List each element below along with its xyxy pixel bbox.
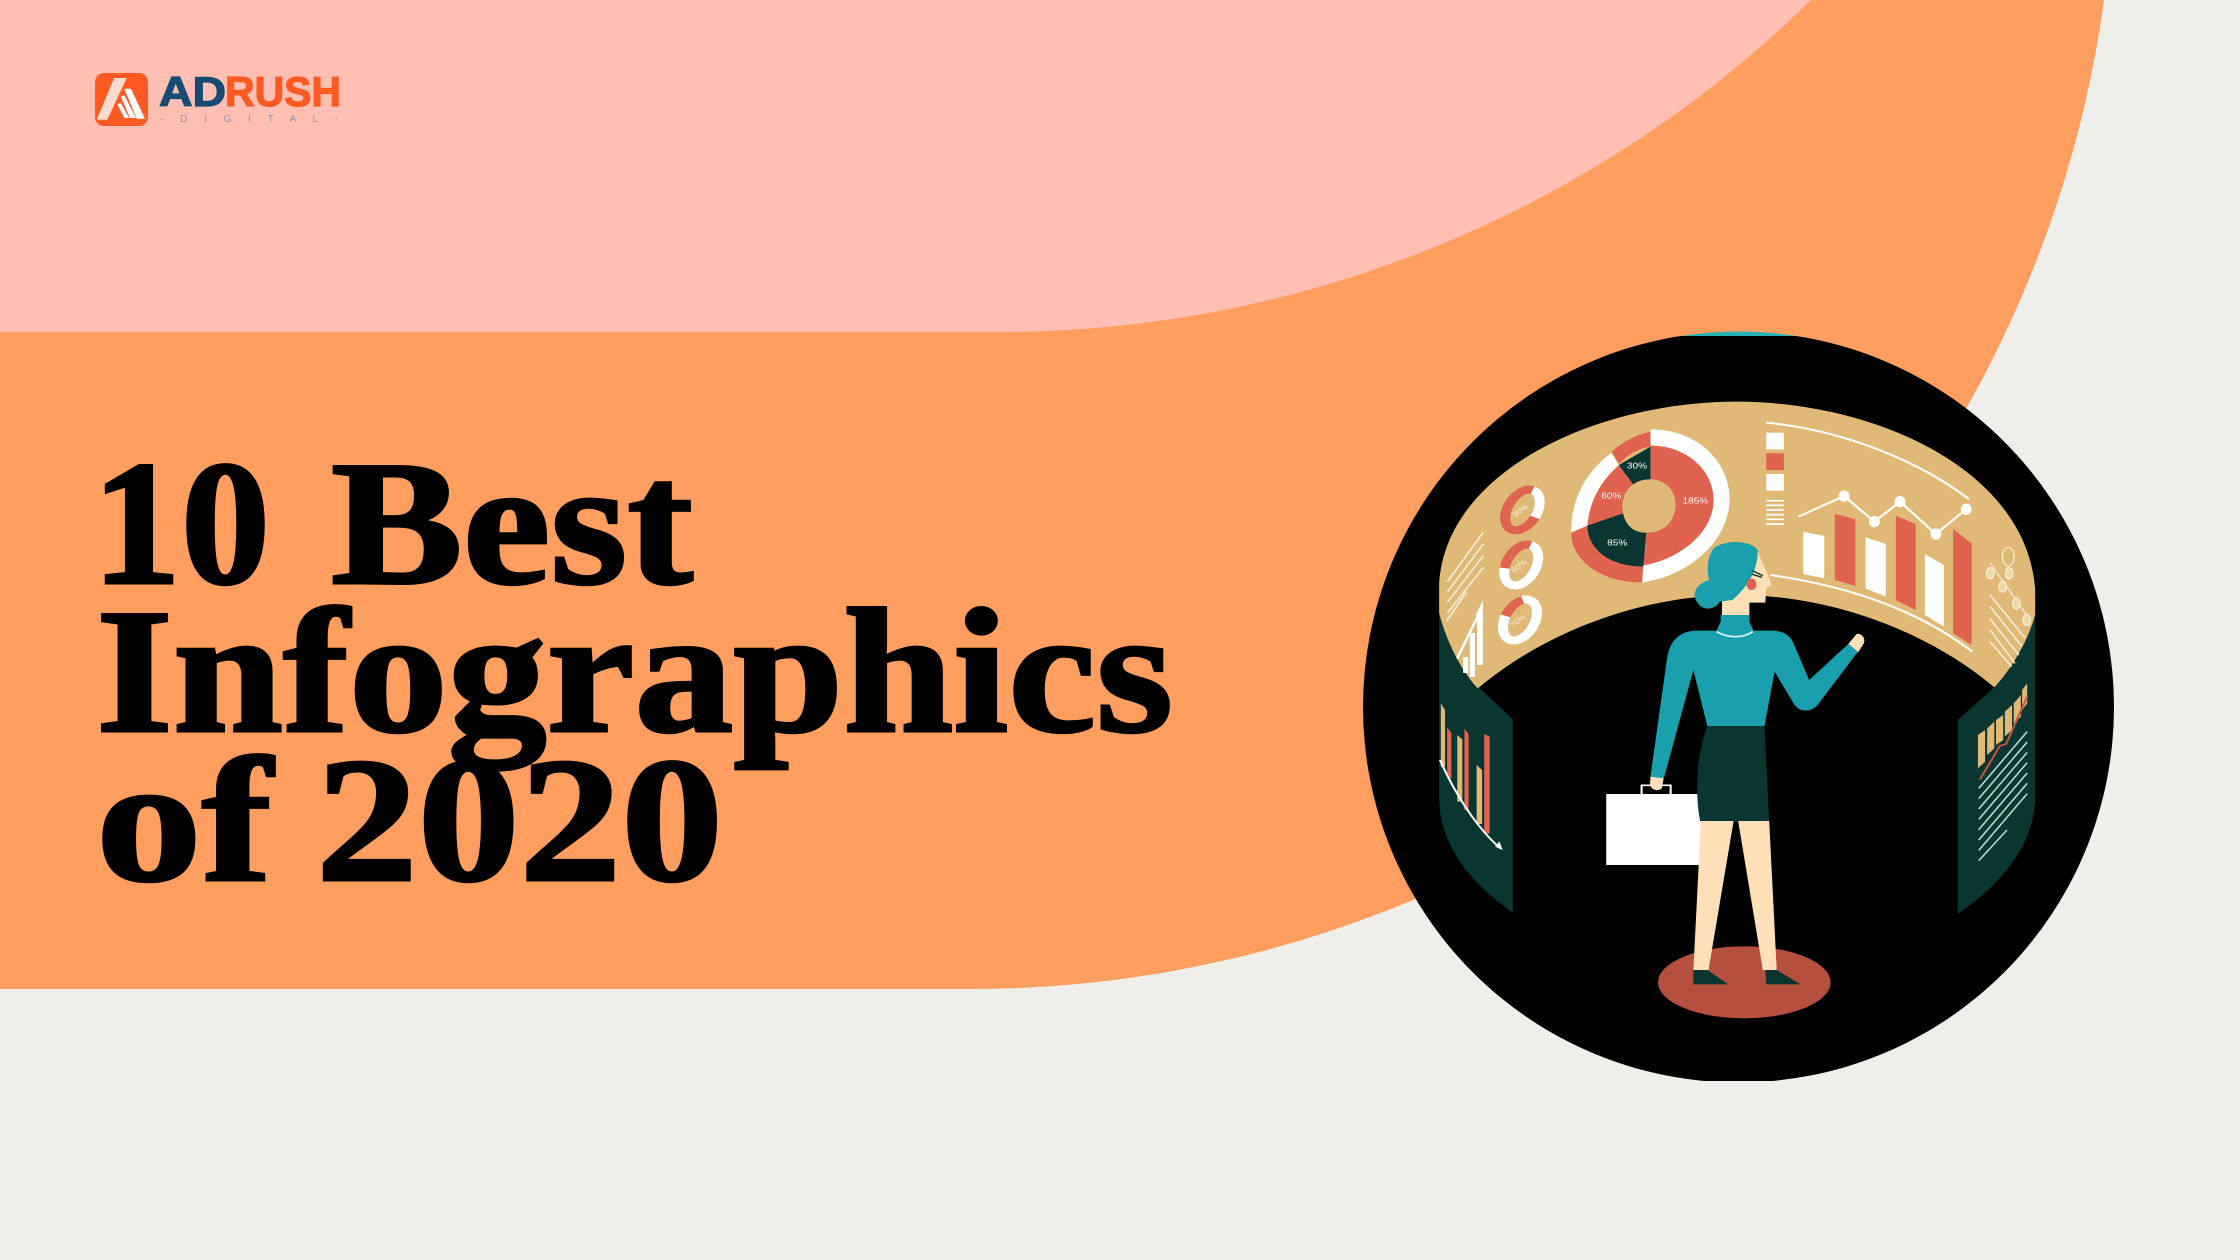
donut labels: 30%: [1627, 462, 1647, 470]
right dark panel: [1958, 600, 2035, 914]
briefcase: [1606, 785, 1702, 865]
title line 3: 2020: [316, 721, 723, 919]
floor ellipse: [1658, 946, 1831, 1018]
donut labels: [1601, 462, 1708, 547]
right text lines: [1990, 595, 2025, 667]
donut labels: 85%: [1607, 538, 1627, 547]
skirt: [1697, 726, 1769, 821]
logo: Adrush Digital: [95, 68, 341, 126]
teal top: [1650, 615, 1858, 778]
illustration: woman viewing curved data wall: [1439, 402, 2035, 1018]
large donut chart: [1571, 429, 1730, 582]
left text lines: [1447, 532, 1483, 621]
teal crescent at circle top: [1681, 332, 1797, 336]
eye: [1751, 571, 1763, 577]
neck and face: [1722, 552, 1772, 620]
donut hole: [1622, 479, 1675, 533]
donut labels: 185%: [1683, 496, 1708, 505]
small donut 60%: 60%: [1508, 557, 1530, 574]
small donut 30%: 30%: [1509, 502, 1531, 519]
gold curved wall: [1439, 402, 2035, 688]
donut labels: 60%: [1601, 492, 1621, 500]
right org chart: [1986, 547, 2031, 626]
woman figure: [1606, 542, 1864, 984]
title line 1: Best: [331, 424, 693, 622]
line chart: [1799, 490, 1972, 540]
cheek: [1746, 579, 1757, 590]
small donut 70%: [1497, 596, 1543, 644]
legs and shoes: [1693, 820, 1801, 984]
small donut 30%: [1498, 486, 1547, 534]
logo wordmark RUSH: RUSH: [225, 68, 341, 115]
logo wordmark AD: AD: [159, 68, 226, 115]
logo icon: [95, 73, 148, 126]
black circle behind illustration: [1363, 332, 2114, 1082]
hands: [1650, 634, 1864, 790]
logo tagline: - D I G I T A L -: [160, 114, 338, 125]
title: [92, 424, 1173, 919]
hair: [1695, 542, 1758, 609]
necklace: [1717, 632, 1753, 637]
legend blocks: [1766, 433, 1784, 524]
left dark panel: [1439, 600, 1513, 913]
top right arc line: [1766, 423, 1969, 499]
pink arc panel: [0, 0, 1811, 332]
title line 3: [96, 721, 723, 919]
small donut 70%: 70%: [1507, 612, 1529, 629]
left arrow chart: [1457, 600, 1483, 677]
title line 2: Infographics: [96, 572, 1173, 770]
orange arc background: [0, 0, 2104, 989]
title line 3: of: [96, 721, 275, 919]
title line 1: [92, 424, 693, 622]
title line 1: 10: [92, 424, 270, 622]
bar chart: [1770, 514, 1972, 652]
small donut 60%: [1498, 541, 1545, 589]
